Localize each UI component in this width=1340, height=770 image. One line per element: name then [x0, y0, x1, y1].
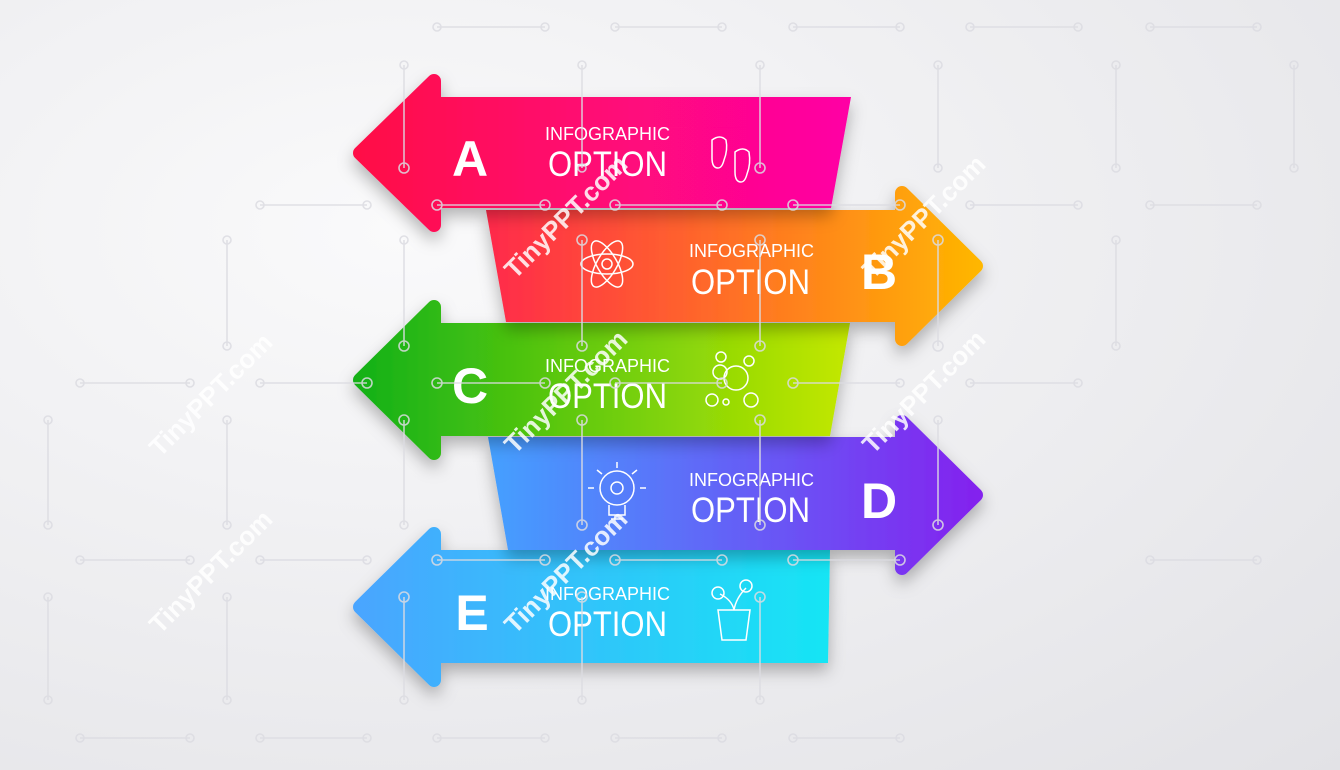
arrow D: [488, 422, 976, 568]
icon: light bulb: [588, 462, 646, 519]
icon: footprints: [712, 137, 750, 182]
letter A: A: [452, 131, 488, 187]
text E: [545, 584, 670, 644]
text A: [545, 124, 670, 184]
text D: [689, 470, 814, 530]
arrow E: [360, 534, 830, 680]
text A: INFOGRAPHIC: [545, 124, 670, 144]
text C: INFOGRAPHIC: [545, 356, 670, 376]
text C: OPTION: [548, 377, 667, 416]
watermarks: TinyPPT.com: [498, 149, 633, 284]
arrow A: [360, 81, 851, 225]
letter B: B: [861, 244, 897, 300]
text B: [689, 241, 814, 302]
text E: OPTION: [548, 605, 667, 644]
watermarks: [143, 149, 991, 639]
text B: INFOGRAPHIC: [689, 241, 814, 261]
text D: OPTION: [691, 491, 810, 530]
watermarks: TinyPPT.com: [143, 327, 278, 462]
watermarks: TinyPPT.com: [143, 504, 278, 639]
text E: INFOGRAPHIC: [545, 584, 670, 604]
arrow C: [360, 307, 850, 453]
letter C: C: [452, 358, 488, 414]
watermarks: TinyPPT.com: [498, 324, 633, 459]
watermarks: TinyPPT.com: [498, 504, 633, 639]
icon: atom: [581, 236, 633, 292]
watermarks: TinyPPT.com: [856, 324, 991, 459]
text D: INFOGRAPHIC: [689, 470, 814, 490]
letter D: D: [861, 473, 897, 529]
watermarks: TinyPPT.com: [856, 149, 991, 284]
letter E: E: [455, 585, 489, 641]
text C: [545, 356, 670, 416]
icon: flower pot: [712, 580, 752, 640]
arrow B: [486, 193, 976, 339]
text A: OPTION: [548, 145, 667, 184]
text B: OPTION: [691, 263, 810, 302]
icon: bubbles: [706, 352, 758, 407]
